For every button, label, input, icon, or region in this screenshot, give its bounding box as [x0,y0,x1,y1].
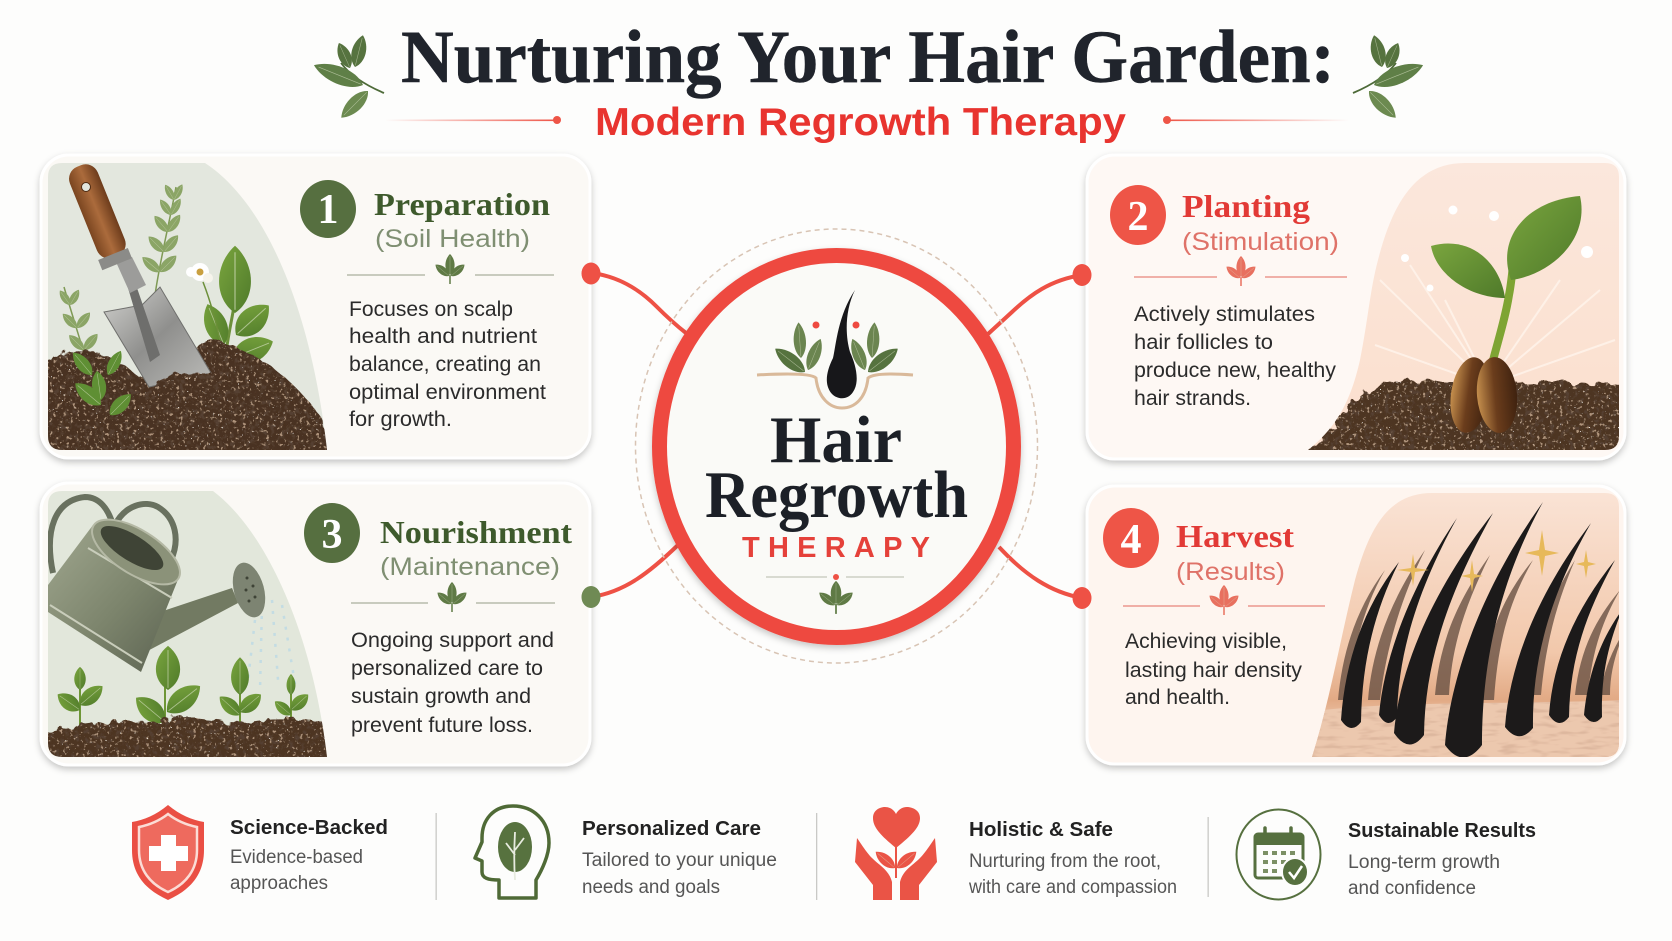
step description: produce new, healthy [1134,359,1336,382]
step description: for growth. [349,408,452,431]
card [1087,155,1625,459]
step description: optimal environment [349,381,546,404]
step description: lasting hair density [1125,659,1302,682]
footer: science-backed [132,805,388,900]
benefit text: approaches [230,873,328,894]
benefit text: Nurturing from the root, [969,851,1161,872]
step number badge [300,180,356,238]
benefit text: and confidence [1348,878,1476,899]
illustration: sprout from seed [1300,163,1630,460]
step number badge [1103,508,1159,568]
divider with sprig [351,582,555,612]
step description: health and nutrient [349,325,537,348]
step heading: Planting [1182,188,1310,224]
step number badge: 3 [322,512,342,558]
panel: central hub: Regrowth [705,458,968,532]
icon: hands holding heart plant [855,807,937,900]
step subheading: (Stimulation) [1182,228,1339,256]
benefit text [230,816,388,894]
connector: card 4 to hub [999,547,1092,609]
step subheading: (Soil Health) [375,225,530,253]
step number badge: 2 [1128,194,1148,240]
step number badge: 4 [1120,517,1142,563]
title: Nurturing Your Hair Garden: [401,16,1335,99]
card [41,155,590,458]
icon: left title leaves [311,34,384,123]
panel: central hub [636,229,1038,663]
step description [1125,630,1302,709]
step number badge: 1 [318,187,338,233]
benefit text: Evidence-based [230,847,363,868]
benefit text: Personalized Care [582,817,761,840]
step description: and health. [1125,686,1230,709]
icon: shield with cross [132,805,204,900]
icon: hair follicle logo [757,290,913,408]
divider with sprig [347,254,554,284]
icon: head with leaf [475,806,549,898]
footer: sustainable results [1236,810,1536,900]
divider with sprig [1123,585,1325,615]
connector: card 1 to hub [582,262,686,333]
step description: hair follicles to [1134,331,1273,354]
subtitle left rule [385,116,561,124]
connector: card 2 to hub [988,264,1092,334]
step description [351,629,554,737]
benefit text: Sustainable Results [1348,819,1536,842]
divider with sprig [1134,256,1347,286]
illustration: hair strands growing from scalp [1305,493,1625,760]
benefit text [968,818,1177,898]
benefit text: Tailored to your unique [582,850,777,871]
panel: step 3 nourishment [40,483,590,775]
connector: card 3 to hub [582,545,678,608]
step subheading: (Maintenance) [380,553,560,581]
benefit text [1348,819,1536,899]
subtitle: Modern Regrowth Therapy [595,101,1126,144]
dashed outer ring [636,229,1038,663]
step subheading: (Results) [1176,558,1285,586]
step number badge [304,503,360,563]
benefit text: with care and compassion [968,877,1177,898]
step description [349,298,546,431]
icon: right title leaves [1353,34,1426,123]
panel: step 2 planting [1087,155,1630,460]
step description: Ongoing support and [351,629,554,652]
step number badge [1110,185,1166,245]
card [1087,486,1625,764]
step description: sustain growth and [351,685,531,708]
benefit text [582,817,777,898]
step description [1134,303,1336,410]
step description: prevent future loss. [351,714,533,737]
footer: holistic and safe [855,807,1177,900]
benefit text: Long-term growth [1348,852,1500,873]
icon: calendar with check [1236,810,1320,900]
panel: step 1 preparation [40,155,590,470]
subtitle right rule [1163,116,1349,124]
footer: personalized care [475,806,777,898]
step description: Achieving visible, [1125,630,1287,653]
step heading: Harvest [1176,518,1294,554]
step description: Actively stimulates [1134,303,1315,326]
illustration: watering can over seedlings [48,491,327,757]
benefit text: Science-Backed [230,816,388,839]
benefit text: Holistic & Safe [969,818,1113,841]
step description: balance, creating an [349,353,541,376]
panel: step 4 harvest [1087,486,1625,764]
step heading: Preparation [374,186,550,222]
step description: hair strands. [1134,387,1251,410]
hub title: Hair [770,403,902,477]
step description: Focuses on scalp [349,298,513,321]
card [41,483,590,765]
hub subtitle: THERAPY [742,532,930,564]
illustration: trowel and plants in soil [48,163,327,450]
hub divider and sprig [766,574,904,614]
step heading: Nourishment [380,514,572,550]
benefit text: needs and goals [582,877,720,898]
red ring [660,256,1014,638]
step description: personalized care to [351,657,543,680]
